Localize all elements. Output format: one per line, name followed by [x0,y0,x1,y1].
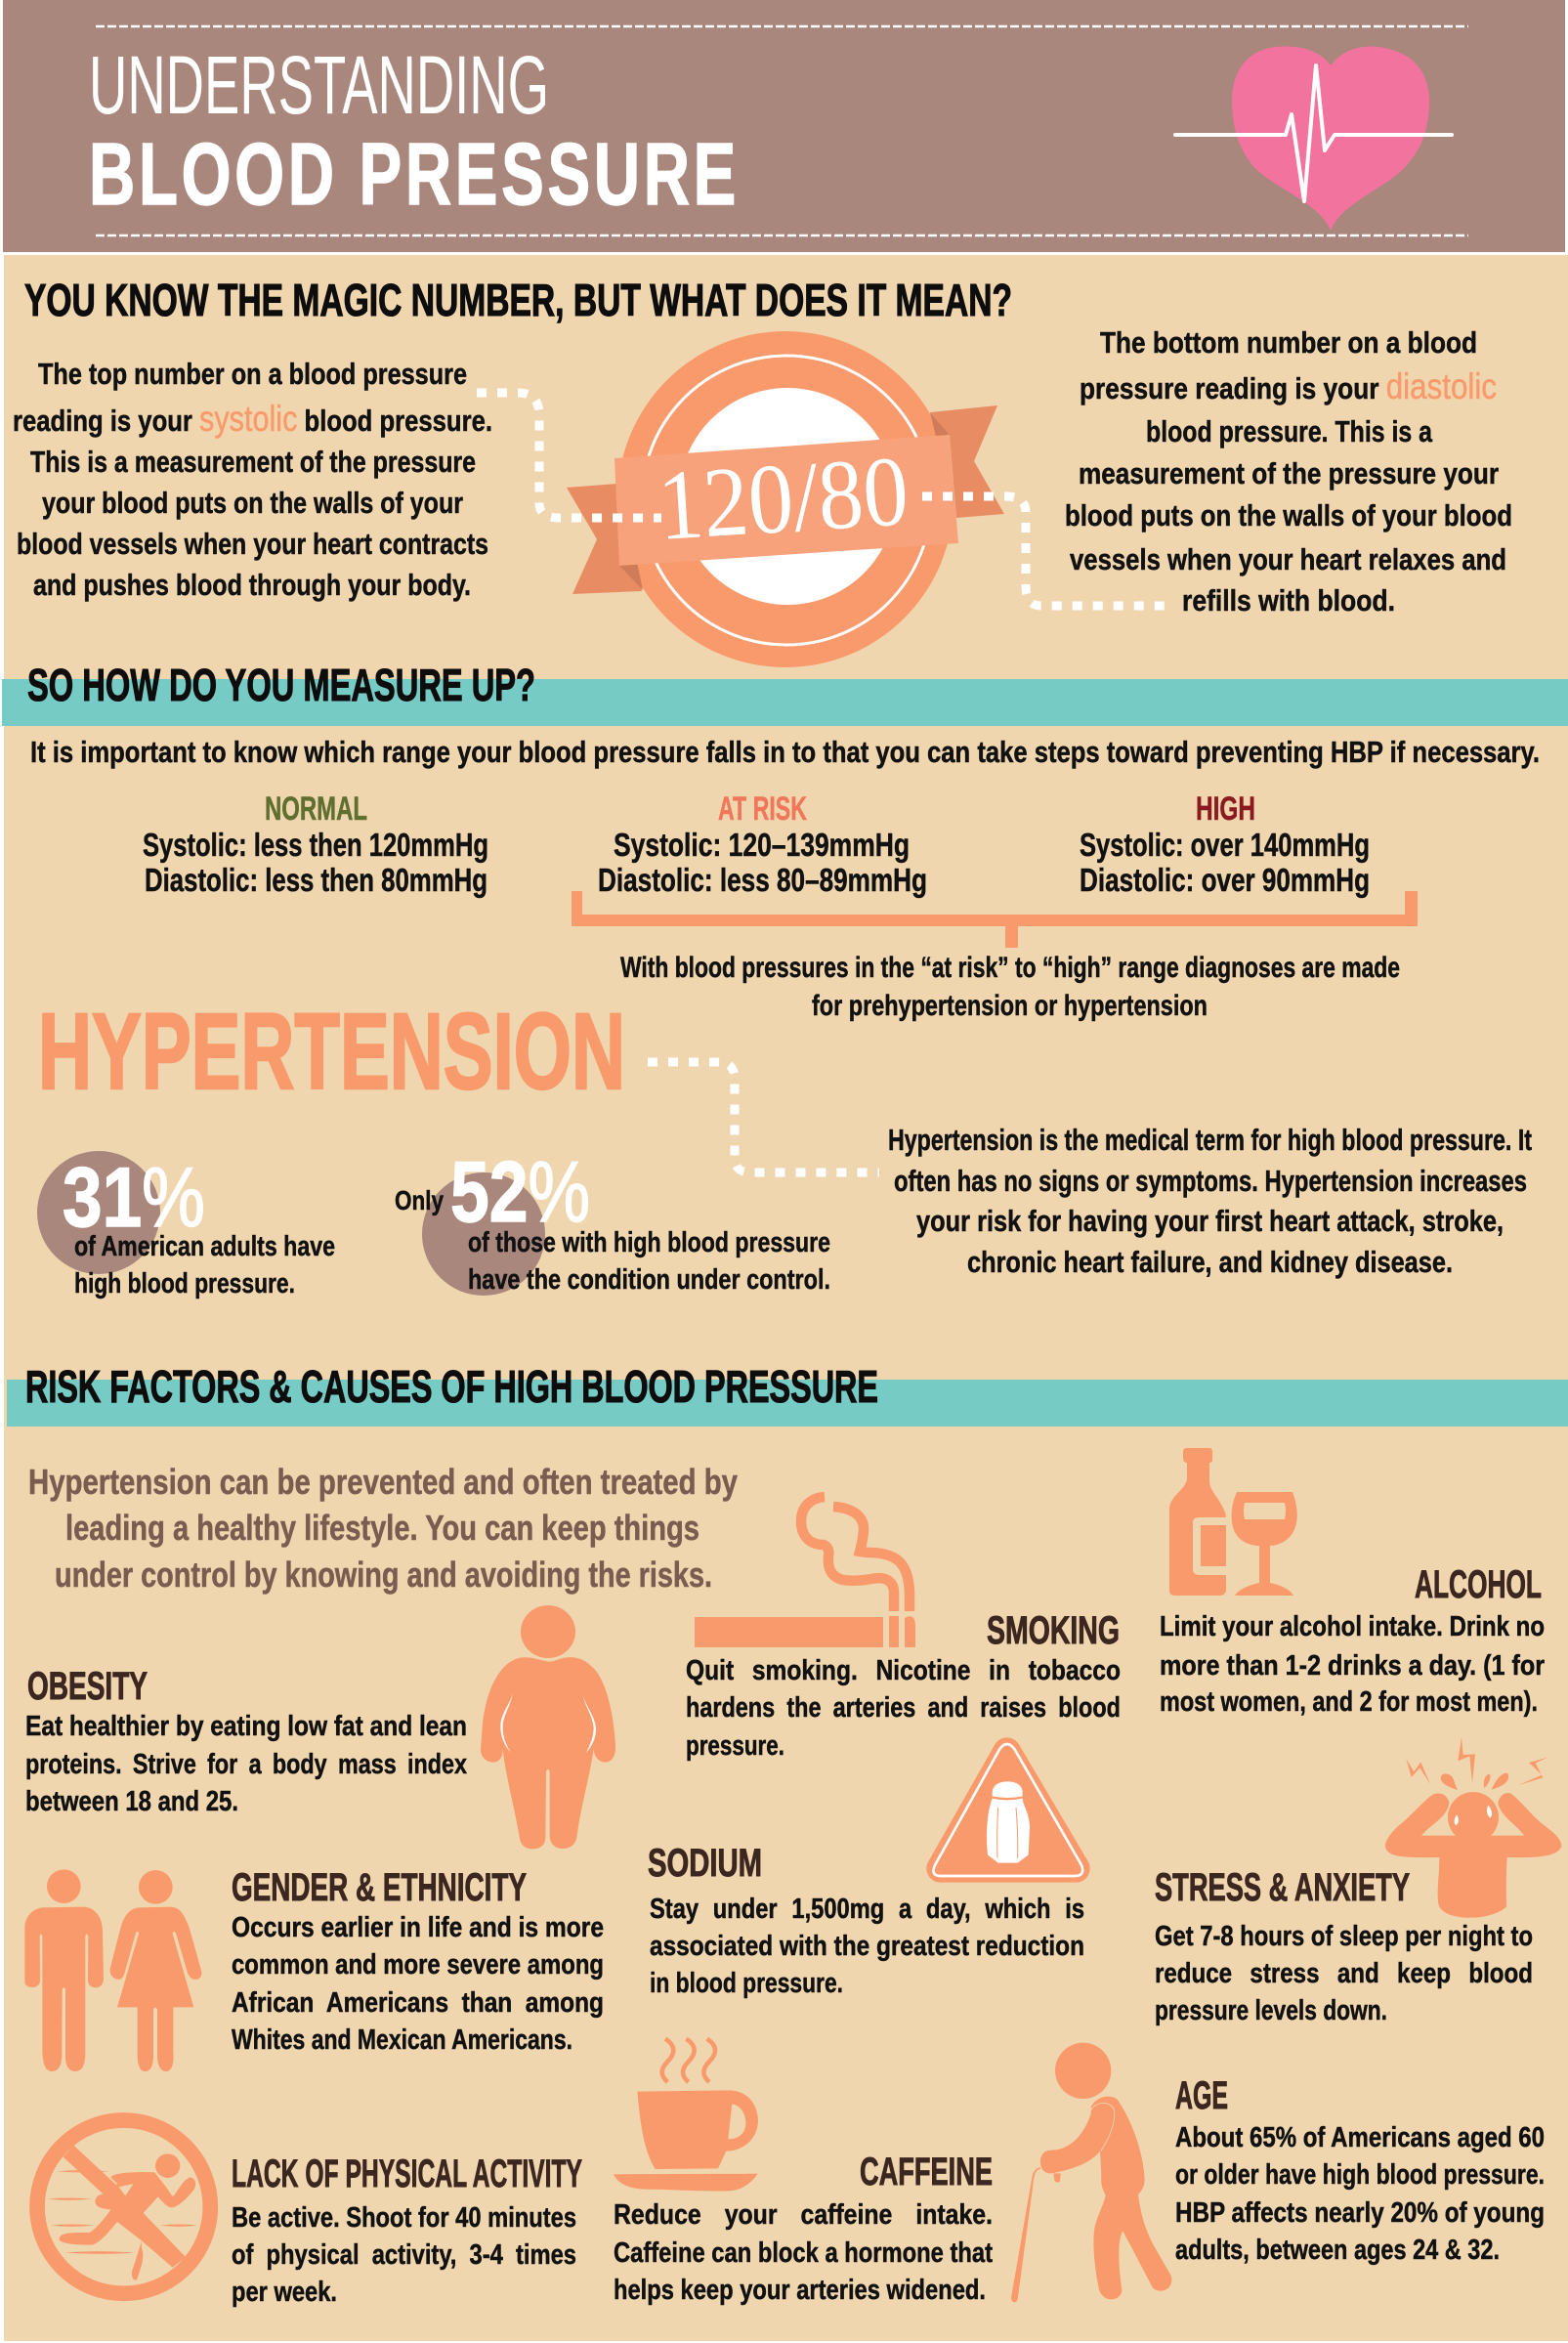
range: high: Systolic: over 140mmHg [1080,827,1370,863]
range: normal: Systolic: less then 120mmHg [143,827,488,863]
arrow: dotted connector hypertension [648,1062,879,1172]
text block: obesity: between 18 and 25. [25,1786,238,1817]
statistic: 52 percent: of those with high blood pressure [468,1227,830,1258]
text block: smoking: hardens the arteries and raises blood [686,1692,1121,1724]
icon: salt warning triangle [933,1744,1082,1876]
panel: header banner [3,0,1565,252]
text block: caffeine: Caffeine can block a hormone that [614,2237,993,2269]
text block: alcohol [1160,1563,1545,1718]
text block: diastolic explanation [1065,325,1512,618]
icon: cigarette [695,1497,915,1647]
text block: prevention intro: leading a healthy lifestyle. You can keep things [65,1508,699,1548]
text block: stress and anxiety [1155,1866,1533,2026]
range: at risk: Systolic: 120–139mmHg [614,827,910,863]
statistic: 31 percent: high blood pressure. [74,1268,295,1299]
text block: age: AGE [1175,2074,1228,2117]
title line one: UNDERSTANDING [89,39,549,131]
text block: systolic explanation: The top number on a blood pressure [38,357,467,391]
text block: hypertension definition [888,1123,1532,1279]
text block: obesity [25,1665,467,1817]
text block: systolic explanation: blood vessels when your heart contracts [17,527,488,561]
text block: systolic explanation: reading is your systolic blood pressure. [13,399,492,439]
text block: caffeine: helps keep your arteries widened. [614,2275,986,2306]
text block: prevention intro: under control by knowing and avoiding the risks. [55,1555,712,1595]
text block: prevention intro: Hypertension can be prevented and often treated by [28,1462,738,1502]
text block: diastolic explanation: blood pressure. This is a [1146,414,1433,448]
statistic: 52 percent: 52% [450,1143,590,1240]
text block: lack of physical activity: per week. [232,2277,337,2308]
icon: elderly person with cane [1011,2043,1171,2302]
heading: magic number: YOU KNOW THE MAGIC NUMBER, BUT WHAT DOES IT MEAN? [24,275,1012,325]
text block: sodium: in blood pressure. [650,1968,843,1999]
text block: gender and ethnicity: Occurs earlier in life and is more [232,1912,604,1943]
text block: caffeine [614,2151,993,2306]
text block: diastolic explanation: The bottom number on a blood [1100,325,1477,360]
text block: smoking [686,1609,1121,1762]
range: at risk: Diastolic: less 80–89mmHg [598,862,927,898]
text block: obesity: proteins. Strive for a body mass index [25,1749,467,1780]
icon: heart with heartbeat line [1175,47,1452,231]
text block: caffeine: CAFFEINE [860,2151,993,2194]
section band: risk factors [7,1361,1568,1427]
text block: gender and ethnicity [232,1866,604,2056]
text block: sodium [648,1842,1084,1999]
text block: diagnosis note [620,952,1400,1022]
text block: stress and anxiety: STRESS & ANXIETY [1155,1866,1410,1909]
bracket: at risk to high [572,891,1418,948]
text block: gender and ethnicity: African Americans than among [232,1987,604,2019]
text block: systolic explanation: and pushes blood through your body. [33,568,471,602]
text block: systolic explanation: your blood puts on the walls of your [42,486,463,520]
text block: age: adults, between ages 24 & 32. [1175,2235,1500,2266]
text block: diastolic explanation: pressure reading is your diastolic [1080,366,1497,406]
icon: stressed person [1385,1737,1561,1918]
statistic: 31 percent: of American adults have [74,1231,335,1262]
text block: diastolic explanation: refills with blood. [1182,583,1395,618]
arrow: dotted connector left [477,393,661,518]
icon: man and woman [24,1869,201,2071]
text block: lack of physical activity [232,2152,582,2308]
range: at risk: AT RISK [718,790,807,828]
text block: obesity: Eat healthier by eating low fat and lean [25,1711,467,1742]
text block: diagnosis note: for prehypertension or hypertension [812,990,1208,1022]
heading: risk factors: RISK FACTORS & CAUSES OF HIGH BLOOD PRESSURE [25,1361,878,1412]
text block: caffeine: Reduce your caffeine intake. [614,2199,993,2231]
text block: diastolic explanation: measurement of the pressure your [1079,456,1499,490]
text block: lack of physical activity: Be active. Shoot for 40 minutes [232,2202,576,2234]
text block: obesity: OBESITY [27,1665,148,1708]
statistic: 52 percent: Only [395,1185,444,1215]
text block: gender and ethnicity: GENDER & ETHNICITY [232,1866,527,1909]
statistic: 52 percent: have the condition under control. [468,1264,830,1296]
text block: smoking: Quit smoking. Nicotine in tobacco [686,1655,1121,1686]
range: normal: NORMAL [265,790,367,828]
text block: gender and ethnicity: common and more severe among [232,1949,604,1981]
range: high: HIGH [1196,790,1255,828]
title line two: BLOOD PRESSURE [89,126,740,224]
text block: sodium: Stay under 1,500mg a day, which is [650,1894,1084,1925]
statistic: 31 percent: 31% [63,1151,205,1245]
heading: hypertension: HYPERTENSION [38,992,625,1112]
text block: smoking: pressure. [686,1730,784,1762]
badge: 120/80 ribbon seal [567,331,1004,667]
text block: age [1175,2074,1545,2266]
number: 120/80: 120/80 [655,436,911,562]
text block: lack of physical activity: LACK OF PHYSICAL ACTIVITY [232,2152,582,2195]
heading: measure up: SO HOW DO YOU MEASURE UP? [27,660,535,710]
text block: hypertension definition: chronic heart failure, and kidney disease. [967,1245,1453,1279]
range: high [1080,790,1370,898]
range: normal: Diastolic: less then 80mmHg [145,862,487,898]
icon: wine bottle and glass [1169,1448,1297,1596]
text block: systolic explanation: This is a measurement of the pressure [30,445,476,479]
text block: smoking: SMOKING [987,1609,1120,1652]
text block: gender and ethnicity: Whites and Mexican Americans. [232,2024,572,2056]
icon: coffee cup [614,2039,758,2192]
arrow: dotted connector right [922,496,1165,606]
range: high: Diastolic: over 90mmHg [1080,862,1370,898]
icon: no running sign [37,2120,210,2293]
range: at risk [598,790,927,898]
text block: lack of physical activity: of physical activity, 3-4 times [232,2239,576,2271]
statistic: 52 percent [395,1143,830,1296]
statistic: 31 percent [37,1151,335,1299]
range: normal [143,790,488,898]
text block: systolic explanation [13,357,492,602]
icon: obese figure [481,1605,615,1849]
text block: stress and anxiety: pressure levels down. [1155,1995,1387,2026]
section band: how do you measure up [2,660,1568,726]
text block: sodium: SODIUM [648,1842,762,1885]
text block: sodium: associated with the greatest reduction [650,1931,1084,1962]
text block: prevention intro [28,1462,738,1595]
